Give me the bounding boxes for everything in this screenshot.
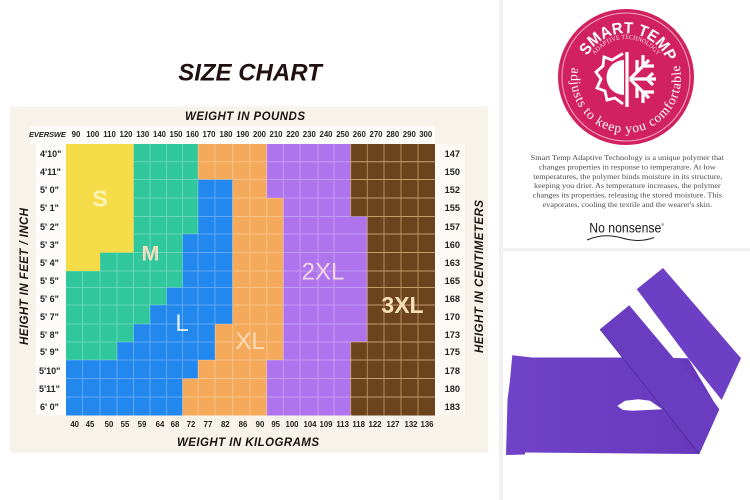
pounds axis labels: 190	[236, 130, 250, 139]
height labels in centimeters: 165	[445, 276, 460, 286]
pounds axis labels: 240	[319, 130, 333, 139]
region: 3XL	[351, 144, 435, 416]
pounds axis labels: 180	[219, 130, 233, 139]
pounds axis labels: 280	[386, 130, 400, 139]
kilograms axis labels: 100	[285, 420, 299, 429]
region: L	[66, 180, 232, 416]
text block: technology description: temperatures, the polymer binds moisture in its structure,	[533, 172, 722, 181]
kilograms axis labels: 59	[138, 420, 147, 429]
height labels in centimeters: 157	[445, 222, 460, 232]
height labels in centimeters: 150	[445, 167, 460, 177]
pounds axis labels: 210	[269, 130, 283, 139]
height labels in centimeters: 147	[445, 149, 460, 159]
small notch between straps	[713, 400, 722, 409]
text block: technology description: keeping you drier. As temperature increases, the polymer	[534, 181, 721, 190]
page dividers	[499, 0, 750, 500]
armhole	[617, 399, 662, 411]
heading: height in feet and inches: HEIGHT IN FEET / INCH	[19, 207, 31, 345]
size label: M: M	[142, 242, 159, 266]
strap seam	[600, 329, 699, 454]
kilograms axis labels: 127	[386, 420, 400, 429]
heading: height in centimeters: HEIGHT IN CENTIMETERS	[474, 200, 486, 353]
height labels in centimeters	[445, 149, 460, 412]
pounds axis labels: 270	[369, 130, 383, 139]
height labels in feet and inches: 5' 2"	[40, 222, 59, 232]
text block: technology description: changes properties in response to temperature. At low	[539, 162, 716, 172]
height labels in feet and inches: 5' 4"	[40, 258, 59, 268]
logo: no nonsense: No nonsense	[589, 220, 661, 236]
pounds axis labels: 110	[103, 130, 116, 139]
text block: technology description: changes its properties, releasing the stored moisture. This	[533, 190, 722, 200]
kilograms axis labels: 50	[105, 420, 114, 429]
kilograms axis labels: 113	[336, 420, 350, 429]
size label: 3XL: 3XL	[381, 292, 424, 318]
height labels in feet and inches: 5' 8"	[40, 330, 59, 340]
text block: technology description: evaporates, cooling the textile and the wearer's skin.	[543, 200, 712, 209]
pounds axis labels: 160	[186, 130, 200, 139]
product: purple garment	[506, 268, 741, 455]
kilograms axis labels: 118	[352, 420, 366, 429]
pounds axis labels: 90	[72, 130, 81, 139]
height labels in feet and inches: 5' 9"	[40, 347, 59, 357]
height labels in centimeters: 175	[445, 347, 460, 357]
pounds axis labels: 100	[86, 130, 100, 139]
pounds axis labels: 130	[136, 130, 150, 139]
height labels in feet and inches: 6' 0"	[40, 402, 59, 412]
kilograms axis labels: 72	[187, 420, 196, 429]
height labels in feet and inches: 4'10"	[40, 149, 61, 159]
region: M	[66, 144, 198, 360]
size label: 2XL: 2XL	[302, 258, 344, 286]
title: SIZE CHART	[178, 60, 324, 86]
pounds axis labels: 150	[169, 130, 183, 139]
text block: technology description: Smart Temp Adaptive Technology is a unique polymer that	[531, 153, 725, 162]
heading: weight in pounds: WEIGHT IN POUNDS	[185, 111, 305, 123]
pounds axis labels	[29, 130, 433, 139]
height labels in centimeters: 173	[445, 330, 460, 340]
kilograms axis labels	[70, 420, 434, 429]
size label: L: L	[175, 310, 189, 337]
logo: no nonsense: ®	[662, 223, 664, 227]
size label: S: S	[92, 186, 108, 212]
pounds axis labels: 140	[153, 130, 167, 139]
strap: middle	[600, 305, 719, 454]
pounds axis labels: 170	[202, 130, 216, 139]
logo: no nonsense	[587, 220, 664, 240]
kilograms axis labels: 77	[204, 420, 212, 429]
height labels in feet and inches: 5' 1"	[40, 203, 59, 213]
kilograms axis labels: 64	[156, 420, 165, 429]
height labels in centimeters: 168	[445, 294, 460, 304]
height labels in centimeters: 163	[445, 258, 460, 268]
text block: technology description	[531, 153, 725, 209]
region: 2XL	[267, 144, 367, 416]
pounds axis labels: 220	[286, 130, 300, 139]
pounds axis labels: 230	[303, 130, 316, 139]
kilograms axis labels: 104	[303, 420, 317, 429]
height labels in centimeters: 160	[445, 240, 460, 250]
height labels in centimeters: 152	[445, 185, 460, 195]
pounds axis labels: 200	[253, 130, 267, 139]
pounds axis labels: 300	[419, 130, 433, 139]
heading: weight in kilograms: WEIGHT IN KILOGRAMS	[177, 437, 319, 449]
kilograms axis labels: 90	[256, 420, 265, 429]
height labels in centimeters: 183	[445, 402, 460, 412]
pounds axis labels: 250	[336, 130, 350, 139]
kilograms axis labels: 55	[121, 420, 130, 429]
pounds axis labels: EVERSWE	[29, 130, 67, 139]
kilograms axis labels: 122	[368, 420, 382, 429]
height labels in feet and inches: 5' 0"	[40, 185, 59, 195]
kilograms axis labels: 68	[171, 420, 180, 429]
chart: size regions	[66, 144, 435, 416]
region: XL	[182, 144, 283, 416]
kilograms axis labels: 40	[70, 420, 80, 429]
height labels in feet and inches: 5' 7"	[40, 312, 59, 322]
height labels in centimeters: 178	[445, 366, 460, 376]
height labels in centimeters: 170	[445, 312, 460, 322]
height labels in feet and inches: 5' 6"	[40, 294, 59, 304]
strap: right	[637, 268, 741, 400]
pounds axis labels: 260	[353, 130, 366, 139]
height labels in feet and inches: 5' 3"	[40, 240, 59, 250]
kilograms axis labels: 86	[239, 420, 248, 429]
region: S	[66, 144, 134, 271]
height labels in feet and inches: 4'11"	[40, 167, 61, 177]
kilograms axis labels: 132	[404, 420, 418, 429]
kilograms axis labels: 45	[86, 420, 95, 429]
kilograms axis labels: 109	[319, 420, 333, 429]
height labels in centimeters: 155	[445, 203, 460, 213]
badge slogan: adjusts to keep you comfortable	[568, 66, 682, 136]
icon: sun and snowflake	[596, 52, 656, 107]
pounds axis labels: 120	[119, 130, 133, 139]
height labels in feet and inches: 5'10"	[39, 366, 60, 376]
gap between straps	[629, 289, 688, 358]
badge heading: SMART TEMP	[580, 22, 676, 58]
garment body	[506, 355, 719, 455]
kilograms axis labels: 136	[420, 420, 434, 429]
height labels in feet and inches: 5'11"	[39, 384, 60, 394]
panel: size chart	[10, 106, 488, 452]
height labels in feet and inches	[39, 149, 61, 412]
height labels in centimeters: 180	[445, 384, 460, 394]
pounds axis labels: 290	[403, 130, 416, 139]
badge: smart temp	[558, 9, 694, 145]
kilograms axis labels: 82	[221, 420, 230, 429]
size label: XL: XL	[235, 328, 265, 355]
height labels in feet and inches: 5' 5"	[40, 276, 59, 286]
kilograms axis labels: 95	[271, 420, 281, 429]
badge subheading: ADAPTIVE TECHNOLOGY	[592, 34, 661, 55]
